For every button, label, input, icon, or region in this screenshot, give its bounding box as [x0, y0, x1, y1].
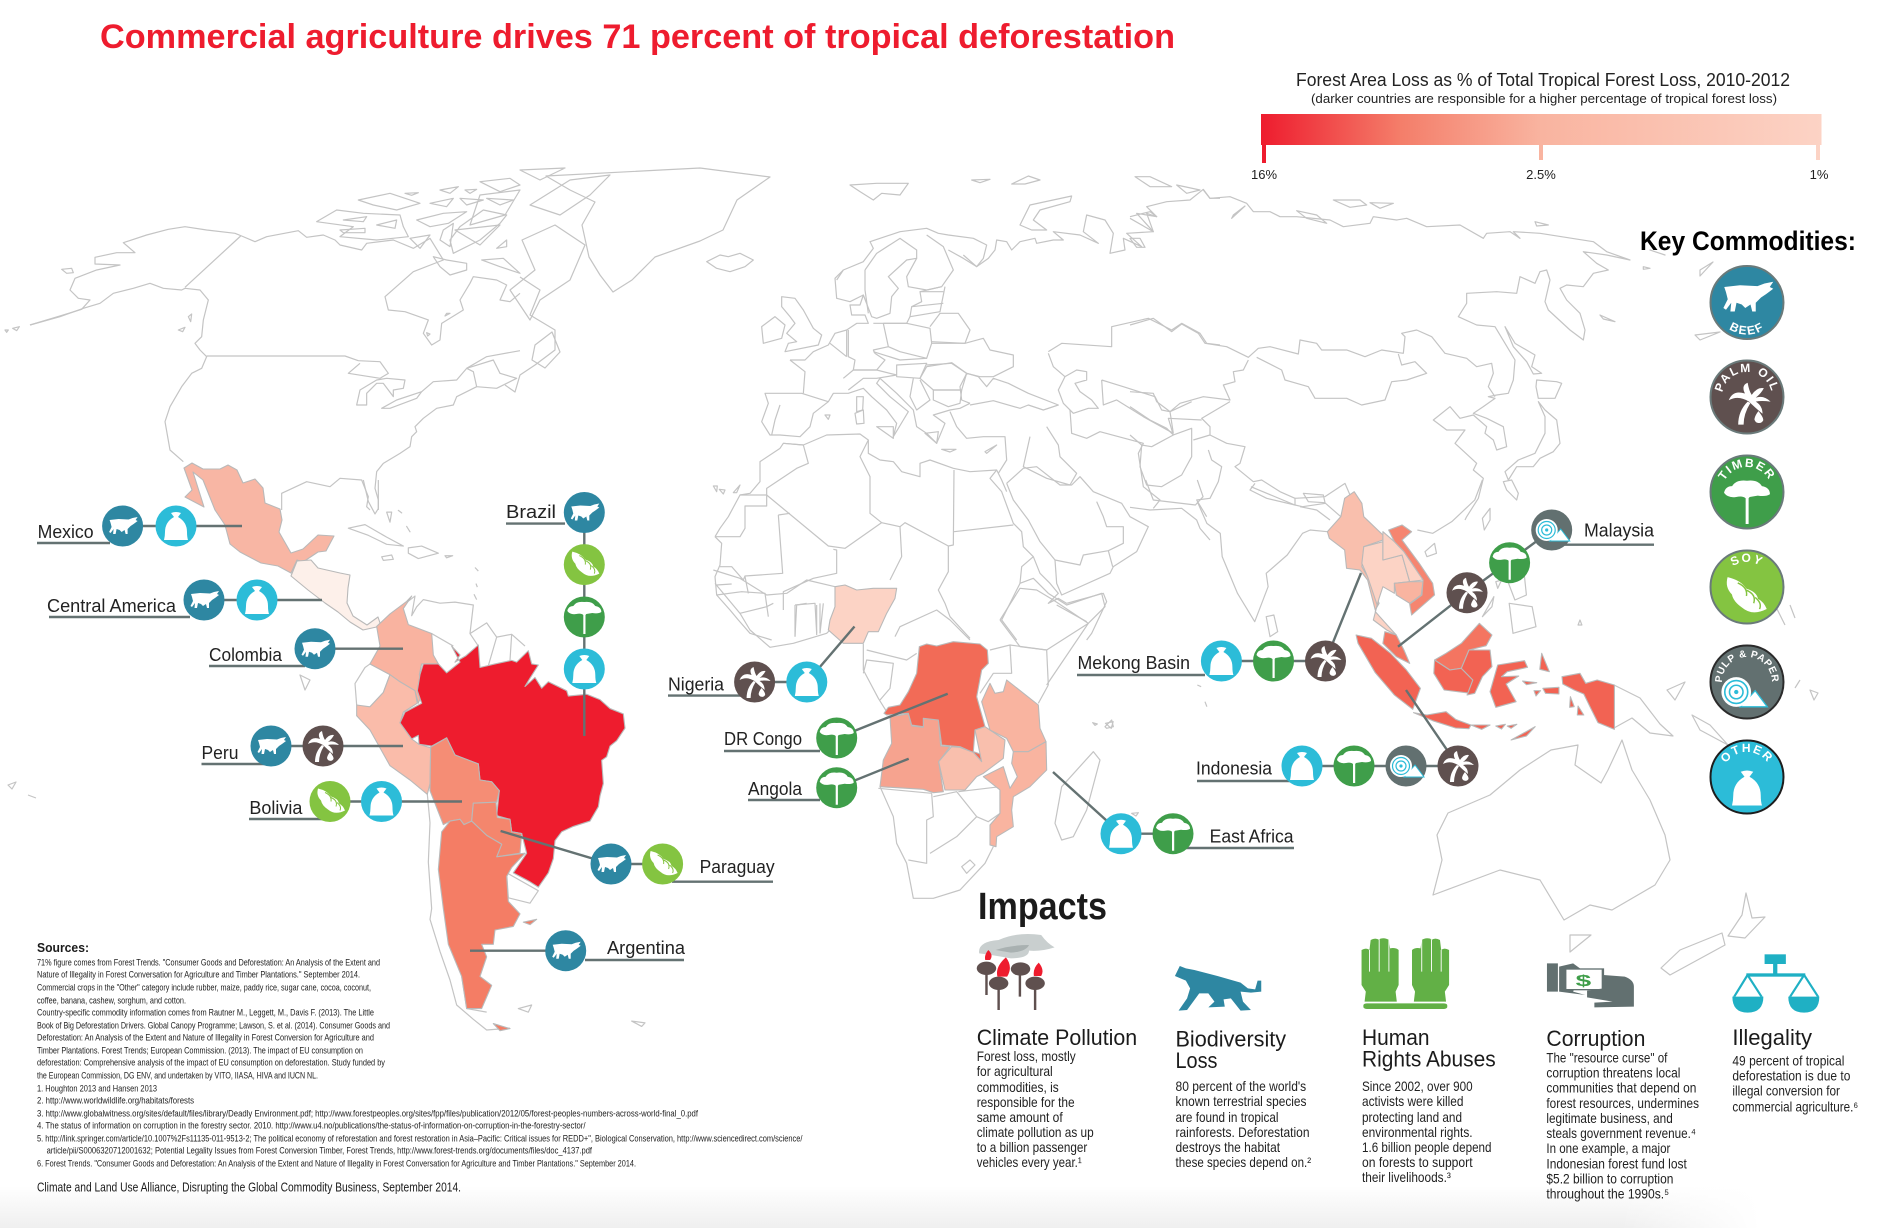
- impact: human rights abuses: 1.6 billion people depend: [1362, 1140, 1492, 1155]
- impact: corruption: Corruption: [1546, 1026, 1645, 1051]
- callout: Argentina: [470, 930, 686, 971]
- legend: forest area loss scale: (darker countries are responsible for a higher percentage of tropical forest loss): [1311, 91, 1777, 106]
- sources block: deforestation: Comprehensive analysis of the impact of EU consumption on deforestation. Study funded by: [37, 1058, 385, 1068]
- Caribbean and South America outlines: [348, 480, 645, 1030]
- impact: corruption: Indonesian forest fund lost: [1546, 1157, 1687, 1172]
- sources block: 6. Forest Trends. "Consumer Goods and Deforestation: An Analysis of the Extent and Nature of Illegality in Forest Conversation for Agriculture and Timber Plantations." September 2014.: [37, 1159, 636, 1169]
- Australia, New Zealand and Pacific islands: [8, 250, 1818, 975]
- impact: biodiversity loss: Loss: [1176, 1048, 1218, 1073]
- legend: forest area loss scale: 1%: [1810, 167, 1829, 182]
- Central and southern Africa: [713, 570, 1138, 898]
- impact: human rights abuses: their livelihoods.³: [1362, 1170, 1451, 1185]
- Paraguay: [472, 802, 522, 857]
- impact: corruption: corruption threatens local: [1546, 1066, 1680, 1081]
- callout: Angola: Angola: [748, 779, 803, 799]
- callout: Central America: Central America: [47, 596, 177, 616]
- impact: illegality: 49 percent of tropical: [1732, 1054, 1844, 1069]
- badge: soy: [1710, 550, 1784, 624]
- sources block: 2. http://www.worldwildlife.org/habitats/forests: [37, 1096, 195, 1106]
- badge: pulp and paper: PULP & PAPER: [1715, 650, 1779, 682]
- sources block: 1. Houghton 2013 and Hansen 2013: [37, 1084, 157, 1094]
- impact: biodiversity loss: are found in tropical: [1176, 1110, 1278, 1125]
- sources block: the European Commission, DG ENV, and undertaken by VITO, IIASA, HIVA and IUCN NL.: [37, 1071, 318, 1081]
- impact: biodiversity loss: [1176, 1027, 1311, 1170]
- impact: human rights abuses: Since 2002, over 900: [1362, 1079, 1473, 1094]
- callout: Brazil: Brazil: [506, 502, 556, 522]
- callout: Mekong Basin: [1077, 573, 1361, 682]
- impact: biodiversity loss: known terrestrial species: [1176, 1094, 1307, 1109]
- impact: climate pollution: Climate Pollution: [977, 1025, 1137, 1050]
- Angola: [880, 714, 950, 793]
- callout: East Africa: East Africa: [1210, 827, 1295, 847]
- impact: biodiversity loss: destroys the habitat: [1176, 1140, 1280, 1155]
- impact: human rights abuses: Human: [1362, 1025, 1430, 1050]
- callout: Nigeria: [668, 626, 854, 702]
- impact: human rights abuses: protecting land and: [1362, 1110, 1462, 1125]
- impact: corruption: The "resource curse" of: [1546, 1051, 1668, 1066]
- sources block: Climate and Land Use Alliance, Disrupting the Global Commodity Business, September 2014.: [37, 1181, 461, 1195]
- sources block: 71% figure comes from Forest Trends. "Consumer Goods and Deforestation: An Analysis of the Extent and: [37, 958, 380, 968]
- badge: beef: BEEF: [1730, 322, 1762, 335]
- impact: human rights abuses: on forests to support: [1362, 1155, 1473, 1170]
- sources block: [37, 940, 803, 1195]
- Tanzania: [982, 680, 1046, 752]
- callout: Peru: Peru: [202, 743, 238, 763]
- badge: soy: SOY: [1730, 554, 1763, 565]
- callout: Malaysia: Malaysia: [1584, 521, 1655, 541]
- callout: East Africa: [1053, 772, 1295, 854]
- callout: Argentina: Argentina: [607, 938, 686, 958]
- Laos: [1383, 532, 1423, 582]
- icon: corruption money hand-over: [1547, 963, 1634, 1007]
- icon: corruption money hand-over: $: [1576, 972, 1592, 989]
- impact: corruption: forest resources, undermines: [1546, 1096, 1699, 1111]
- badge: palm oil: PALM OIL: [1714, 364, 1778, 392]
- bottom page shading: [0, 1186, 1760, 1228]
- impact: corruption: [1546, 1026, 1699, 1202]
- callout: Colombia: Colombia: [209, 645, 283, 665]
- Colombia: [370, 596, 438, 703]
- sources block: Deforestation: An Analysis of the Extent and Nature of Illegality in Forest Conversion for Agriculture and: [37, 1033, 374, 1043]
- callout: Brazil: [506, 492, 605, 736]
- icon: human rights hands: [1362, 938, 1449, 1009]
- Argentina: [438, 819, 537, 1031]
- legend: forest area loss scale: [1251, 70, 1829, 182]
- sources block: article/pii/S0006320712001632; Potential Legality Issues from Forest Conversion Timber, Forest Trends, http://www.forest-trends.org/documents/files/doc_4137.pdf: [47, 1146, 592, 1156]
- impact: corruption: steals government revenue.⁴: [1546, 1126, 1696, 1141]
- world map outlines: [5, 168, 1818, 1030]
- impact: biodiversity loss: rainforests. Deforestation: [1176, 1125, 1310, 1140]
- sources block: 5. http://link.springer.com/article/10.1007%2Fs11135-011-9513-2; The political economy of reforestation and forest restoration in Asia–Pacific: Critical issues for REDD+", Biological Conservation, http://www.sciencedirect.com/science/: [37, 1134, 803, 1144]
- badge: pulp and paper: [1710, 644, 1784, 720]
- impact: illegality: illegal conversion for: [1732, 1084, 1840, 1099]
- Central America: [291, 560, 381, 630]
- heading: key commodities: Key Commodities:: [1640, 226, 1856, 256]
- DR Congo: [884, 642, 988, 762]
- impact: biodiversity loss: 80 percent of the world's: [1176, 1079, 1306, 1094]
- sources block: Sources:: [37, 940, 89, 955]
- Peru: [357, 675, 431, 794]
- callout: Colombia: [209, 628, 403, 669]
- Vietnam: [1389, 525, 1435, 615]
- legend: forest area loss scale: 16%: [1251, 167, 1277, 182]
- badge: other: [1710, 740, 1784, 814]
- legend: forest area loss scale: 2.5%: [1526, 167, 1556, 182]
- Bolivia: [430, 738, 499, 825]
- callout: Paraguay: [501, 831, 775, 884]
- callout: Paraguay: Paraguay: [700, 857, 775, 877]
- impact icons: [977, 934, 1819, 1013]
- callout: Bolivia: Bolivia: [249, 798, 303, 818]
- icon: biodiversity jaguar: [1175, 966, 1261, 1011]
- North America west outlines: [5, 178, 520, 510]
- impact: corruption: In one example, a major: [1546, 1141, 1671, 1156]
- impact: corruption: legitimate business, and: [1546, 1111, 1673, 1126]
- callout: Indonesia: [1196, 690, 1478, 786]
- Brazil: [400, 645, 625, 887]
- heading: Impacts: Impacts: [978, 886, 1107, 928]
- callout: Mekong Basin: Mekong Basin: [1078, 653, 1190, 673]
- Mozambique: [983, 742, 1047, 847]
- Cambodia: [1394, 582, 1423, 603]
- impact: biodiversity loss: these species depend on.²: [1176, 1155, 1311, 1170]
- sources block: Country-specific commodity information comes from Rautner M., Leggett, M., Davis F. (2013). The Little: [37, 1008, 374, 1018]
- Zambia: [939, 727, 1005, 790]
- Russia east, Mongolia, China, Japan: [1130, 177, 1650, 520]
- callout: DR Congo: [724, 694, 948, 758]
- impact: climate pollution: climate pollution as up: [977, 1125, 1094, 1140]
- callout: Bolivia: [249, 781, 462, 822]
- impact: human rights abuses: environmental rights.: [1362, 1125, 1473, 1140]
- impact: climate pollution: same amount of: [977, 1110, 1063, 1125]
- impact: biodiversity loss: Biodiversity: [1176, 1027, 1286, 1052]
- callout: DR Congo: DR Congo: [724, 729, 802, 749]
- sources block: Timber Plantations. Forest Trends; European Commission. (2013). The impact of EU consumption on: [37, 1046, 363, 1056]
- impact: corruption: communities that depend on: [1546, 1081, 1696, 1096]
- impact: corruption: throughout the 1990s.⁵: [1546, 1187, 1669, 1202]
- impact: climate pollution: commodities, is: [977, 1080, 1059, 1095]
- South-East Asia, India and Pacific outlines: [1105, 480, 1582, 728]
- impact: climate pollution: vehicles every year.¹: [977, 1155, 1082, 1170]
- impact: climate pollution: for agricultural: [977, 1064, 1053, 1079]
- sources block: coffee, banana, cashew, sorghum, and cotton.: [37, 996, 186, 1006]
- callout: Central America: [47, 580, 322, 620]
- Arctic Canada, Labrador and Greenland: [455, 168, 770, 392]
- callout: Mexico: Mexico: [38, 522, 94, 542]
- Malaysia: [1383, 623, 1492, 670]
- Mexico: [184, 463, 334, 573]
- Europe, Russia west and Near East: [707, 176, 1220, 508]
- sources block: Commercial crops in the "Other" category include rubber, maize, paddy rice, sugar cane, cocoa, coconut,: [37, 983, 371, 993]
- impact: illegality: Illegality: [1732, 1025, 1812, 1050]
- badge: other: OTHER: [1721, 744, 1772, 762]
- callout: Nigeria: Nigeria: [668, 675, 725, 695]
- icon: climate pollution burning trees: [977, 934, 1055, 1010]
- map: coloured countries: [184, 463, 1614, 1031]
- North Africa and Arabia: [713, 434, 1210, 640]
- impact: human rights abuses: [1362, 1025, 1496, 1185]
- African countries: [828, 585, 1047, 847]
- Thailand: [1362, 542, 1410, 635]
- legend: forest area loss scale: Forest Area Loss as % of Total Tropical Forest Loss, 2010-2012: [1296, 70, 1790, 90]
- impact: human rights abuses: activists were killed: [1362, 1094, 1464, 1109]
- legend: key commodity badges: [1710, 265, 1784, 814]
- impact: climate pollution: Forest loss, mostly: [977, 1049, 1076, 1064]
- impact: climate pollution: [977, 1025, 1137, 1170]
- callout: Mexico: [37, 506, 242, 546]
- badge: timber: TIMBER: [1718, 458, 1774, 480]
- sources block: Nature of Illegality in Forest Conversation for Agriculture and Timber Plantations." September 2014.: [37, 970, 360, 980]
- impact: illegality: deforestation is due to: [1732, 1069, 1850, 1084]
- impact: corruption: $5.2 billion to corruption: [1546, 1172, 1673, 1187]
- impact: climate pollution: responsible for the: [977, 1095, 1075, 1110]
- impact: climate pollution: to a billion passenger: [977, 1140, 1088, 1155]
- sources block: Book of Big Deforestation Drivers. Global Canopy Programme; Lawson, S. et al. (2014). Consumer Goods and: [37, 1021, 390, 1031]
- icon: illegality scales: [1732, 954, 1819, 1013]
- sources block: 4. The status of information on corruption in the forestry sector. 2010. http://www.u4.no/publications/the-status-of-information-on-corruption-in-the-forestry-sector/: [37, 1121, 586, 1131]
- impact: illegality: [1732, 1025, 1858, 1115]
- impact: human rights abuses: Rights Abuses: [1362, 1047, 1496, 1072]
- Nigeria: [828, 585, 897, 643]
- Myanmar: [1327, 492, 1383, 610]
- callout: Peru: [202, 726, 403, 766]
- callout: Malaysia: [1398, 510, 1655, 647]
- sources block: 3. http://www.globalwitness.org/sites/default/files/library/Deadly Environment.pdf; http://www.forestpeoples.org/sites/fpp/files/publication/2012/05/forest-peoples-numbers-across-world-final_0.pdf: [37, 1109, 698, 1119]
- Indonesia: [1356, 635, 1614, 740]
- South America countries: [357, 596, 625, 1031]
- South-East Asian countries: [1327, 492, 1614, 740]
- impact: illegality: commercial agriculture.⁶: [1732, 1100, 1858, 1115]
- badge: timber: [1710, 454, 1784, 530]
- title: Commercial agriculture drives 71 percent of tropical deforestation: [100, 18, 1175, 56]
- badge: beef: [1710, 265, 1784, 340]
- callout: Indonesia: Indonesia: [1196, 759, 1273, 779]
- callout: Angola: [748, 759, 909, 808]
- badge: palm oil: [1710, 360, 1784, 434]
